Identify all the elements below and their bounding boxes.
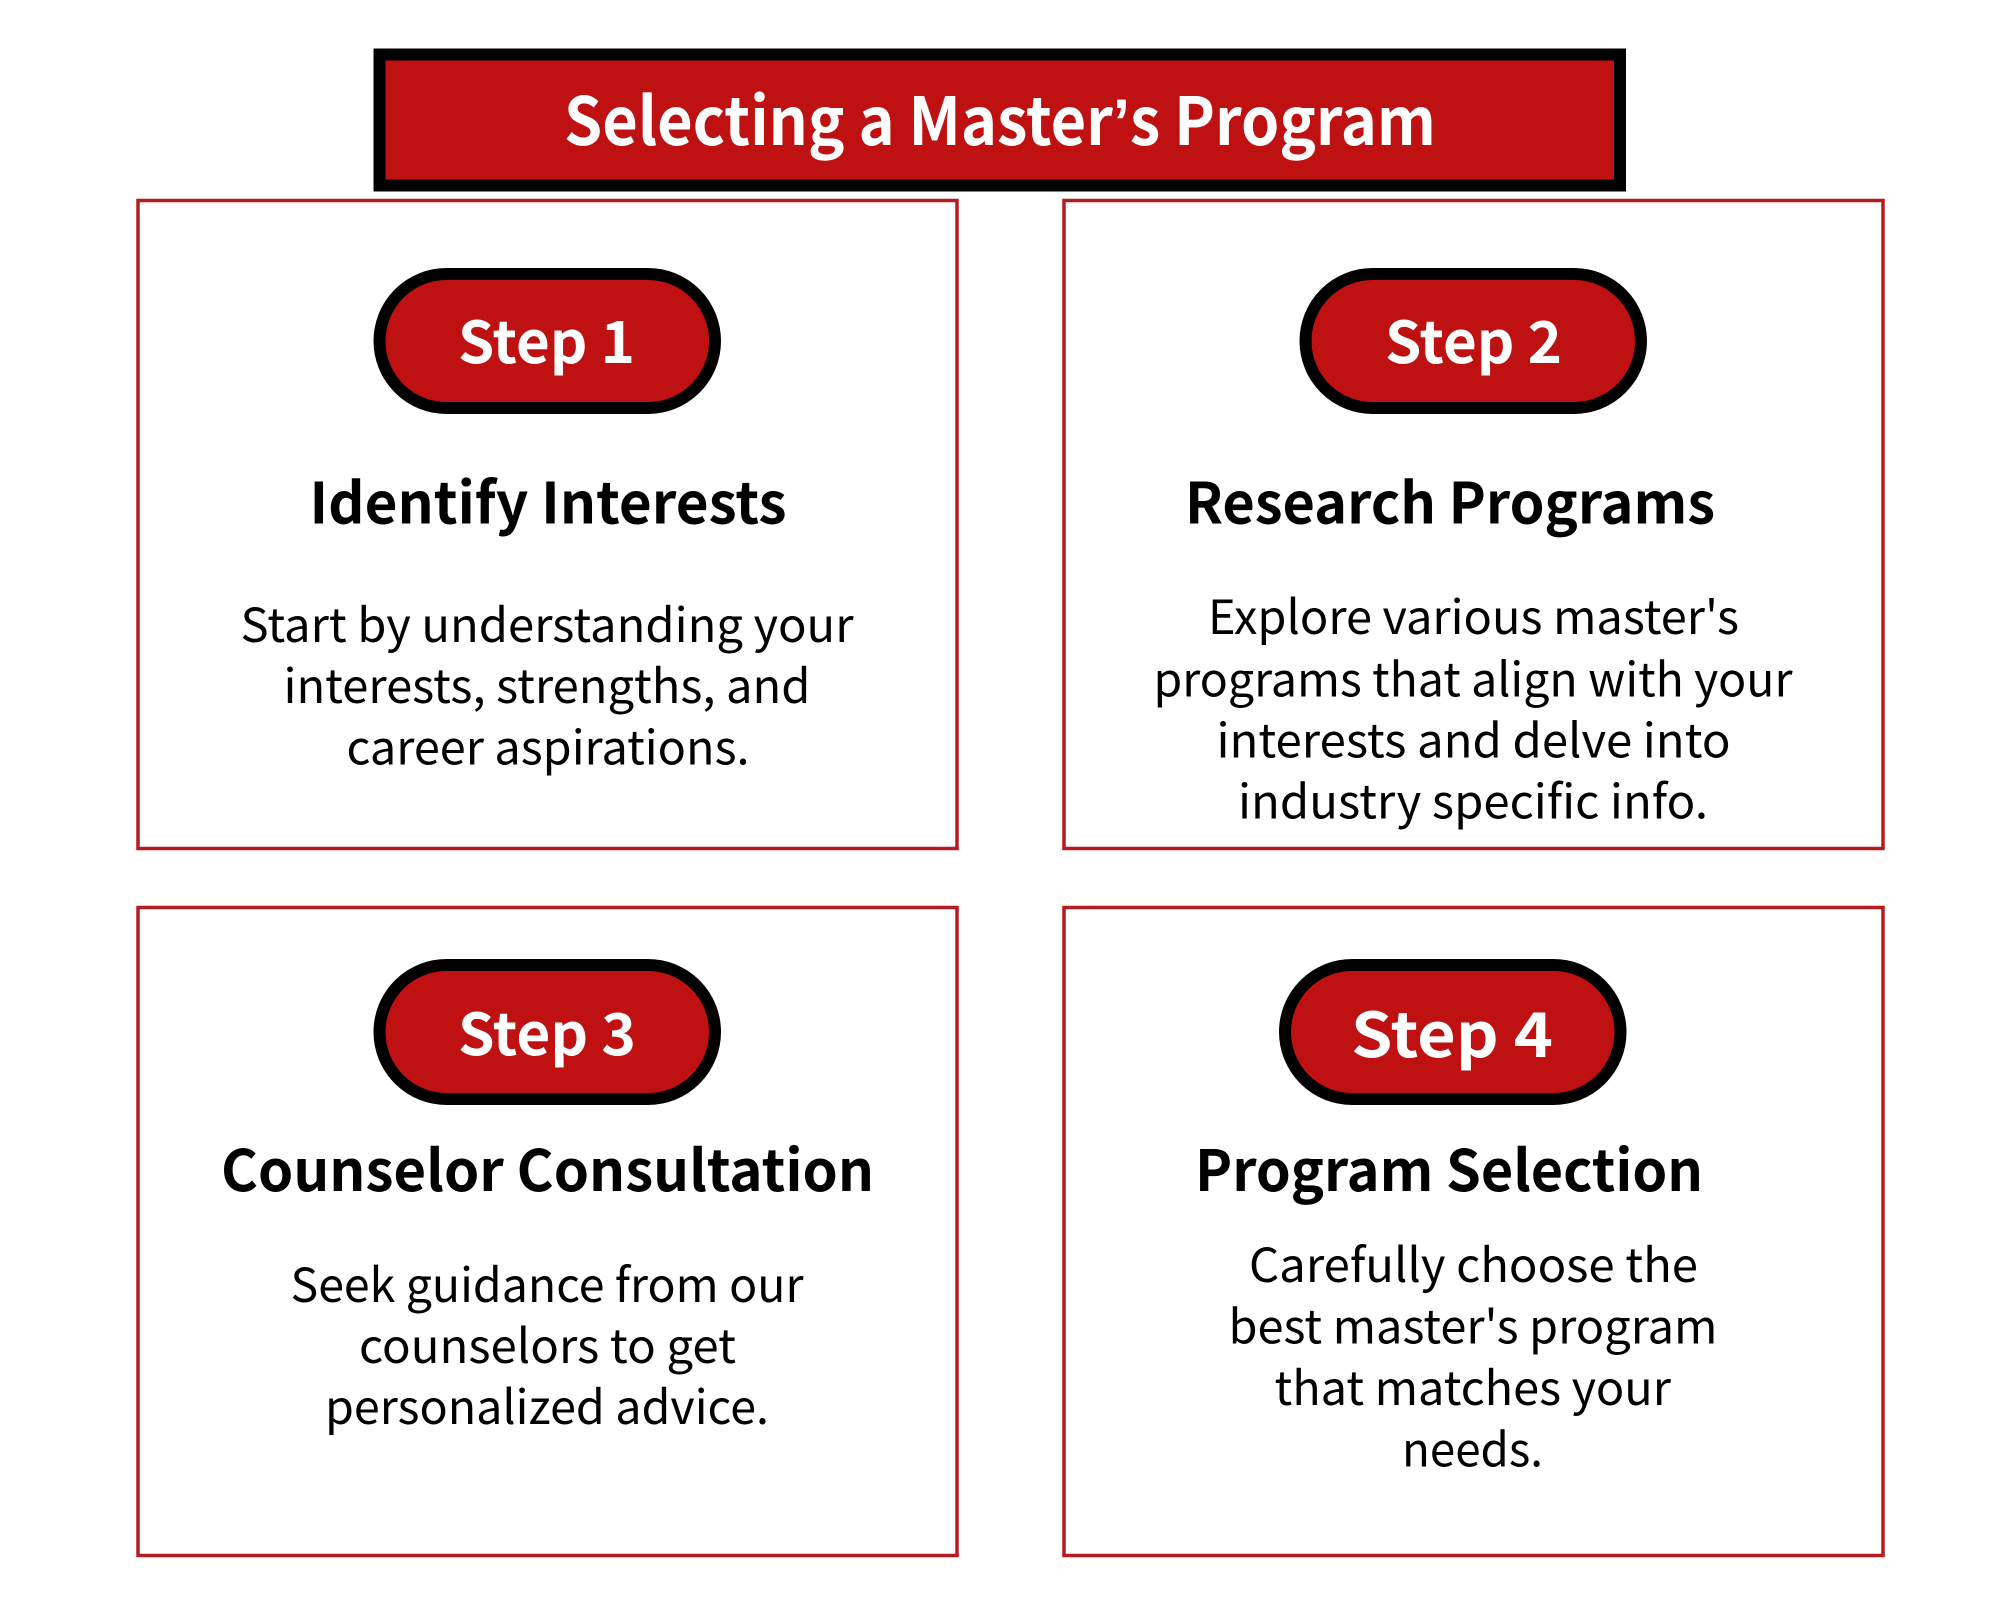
- step 2 badge: [1306, 274, 1641, 408]
- step 3 badge: Step 3: [458, 988, 636, 1072]
- step 3 heading: Counselor Consultation: [221, 1126, 874, 1208]
- title banner: [380, 54, 1620, 186]
- title: Selecting a Master’s Program: [564, 69, 1436, 165]
- step 1 badge: [380, 274, 715, 408]
- step 3 description: personalized advice.: [325, 1369, 769, 1438]
- step 3 badge: [380, 965, 715, 1099]
- step 4 badge: Step 4: [1351, 985, 1553, 1075]
- step 3 description: [290, 1247, 804, 1438]
- step 4 description: needs.: [1402, 1412, 1543, 1480]
- step 2 description: programs that align with your: [1154, 642, 1793, 710]
- panel: step 1: [138, 200, 957, 848]
- panel: step 2: [1064, 200, 1883, 848]
- step 2 description: industry specific info.: [1238, 764, 1708, 832]
- step 3 description: counselors to get: [359, 1308, 736, 1377]
- step 2 description: [1154, 579, 1793, 832]
- step 4 description: best master's program: [1228, 1288, 1718, 1358]
- step 4 badge: [1285, 965, 1620, 1099]
- step 2 heading: Research Programs: [1185, 458, 1715, 540]
- step 4 description: that matches your: [1274, 1350, 1672, 1419]
- step 4 heading: Program Selection: [1195, 1126, 1703, 1208]
- step 4 description: [1228, 1227, 1718, 1480]
- step 1 heading: Identify Interests: [310, 458, 786, 540]
- panel: step 4: [1064, 908, 1883, 1556]
- step 1 description: Start by understanding your: [240, 587, 854, 656]
- step 2 description: interests and delve into: [1216, 702, 1730, 772]
- step 1 description: [240, 587, 854, 778]
- panel: step 3: [138, 908, 957, 1556]
- step 2 description: Explore various master's: [1208, 579, 1739, 648]
- step 3 description: Seek guidance from our: [290, 1247, 804, 1316]
- step 4 description: Carefully choose the: [1249, 1227, 1698, 1296]
- step 2 badge: Step 2: [1385, 296, 1562, 380]
- step 1 badge: Step 1: [458, 296, 635, 380]
- step 1 description: career aspirations.: [346, 710, 750, 778]
- step 1 description: interests, strengths, and: [284, 648, 810, 717]
